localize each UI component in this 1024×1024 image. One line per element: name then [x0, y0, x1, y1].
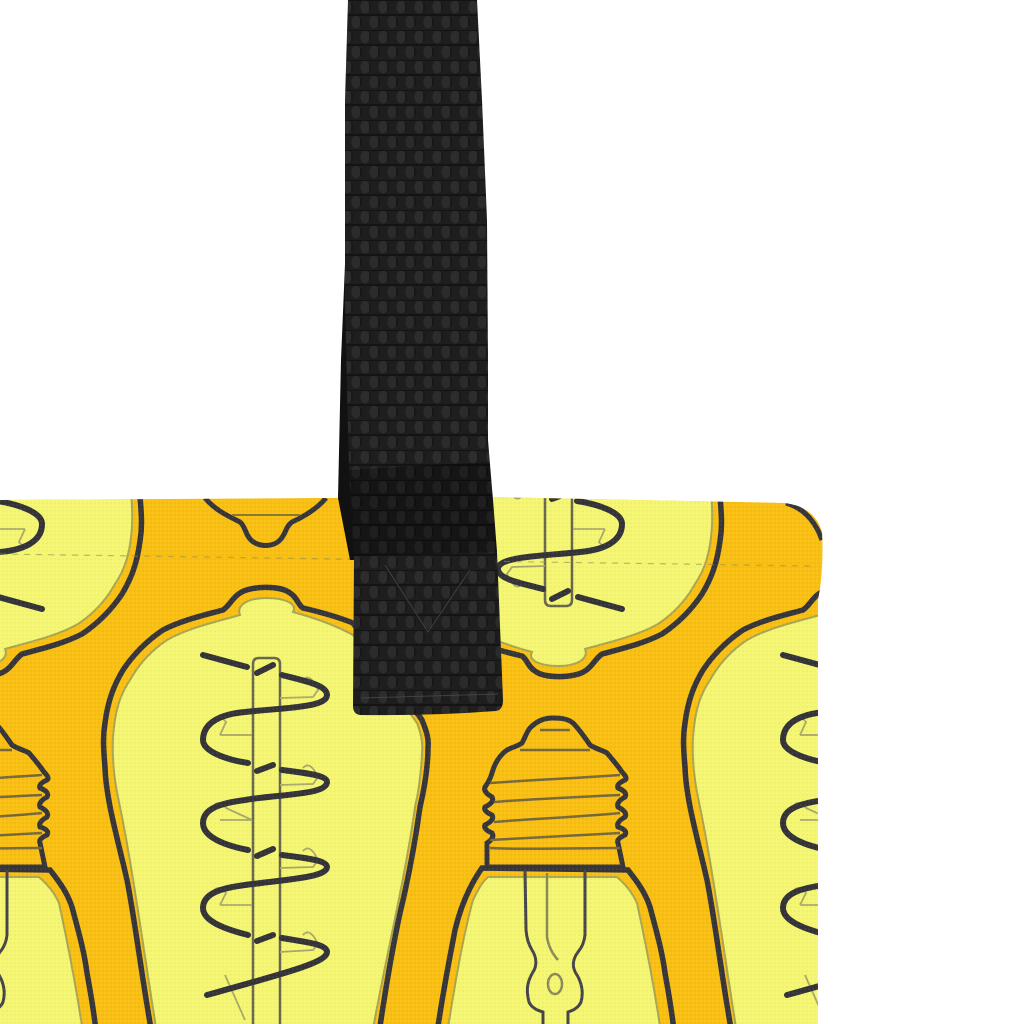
black woven strap: [338, 0, 503, 715]
bulb: bottom left: [0, 718, 97, 1024]
hem stitching: [0, 554, 810, 566]
bulb: top left, inverted: [0, 499, 144, 676]
bulb: top right, inverted: [492, 497, 724, 680]
bulb: top centre base: [205, 498, 326, 546]
strap fold shadow: [349, 462, 497, 556]
corner bulb fragment: [786, 503, 822, 540]
bulb: bottom centre: [436, 718, 675, 1024]
strap rear layer: [338, 240, 400, 560]
fabric texture: [0, 490, 830, 1024]
bulb: right: [680, 590, 820, 1024]
strap stitching: [362, 565, 498, 698]
bulb: centre large: [104, 587, 428, 1024]
fabric panel: [0, 497, 822, 1024]
strap front layer: [345, 0, 503, 715]
